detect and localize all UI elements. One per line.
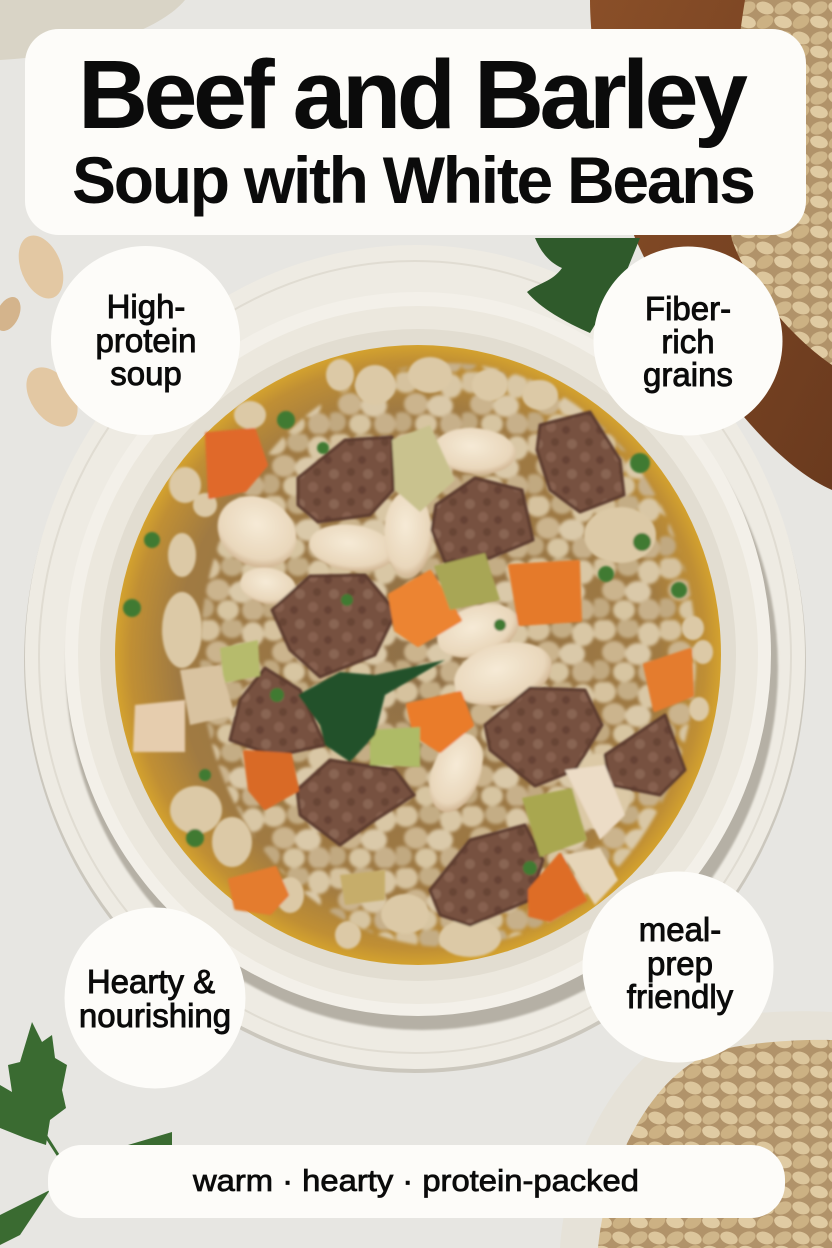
badge: hearty and nourishing: Hearty & (87, 963, 215, 1000)
title line 1: Beef and Barley (78, 40, 748, 149)
parsley sprig, bottom left (0, 1022, 172, 1245)
badge: fiber-rich grains: rich (661, 323, 715, 360)
ingredients layer (123, 357, 713, 957)
cloth in top-left corner (0, 0, 185, 60)
soup bowl (65, 292, 778, 1030)
badge: hearty and nourishing: nourishing (79, 997, 231, 1034)
parsley flecks (123, 411, 687, 875)
badge: meal-prep friendly: prep (647, 945, 713, 982)
tagline bar (48, 1145, 785, 1218)
soup broth (115, 345, 721, 965)
badge: fiber-rich grains: Fiber- (645, 290, 731, 327)
celery and onion pieces (133, 425, 625, 905)
white beans (204, 425, 559, 820)
badge: hearty and nourishing (64, 908, 246, 1088)
badge: high-protein soup: protein (96, 322, 196, 359)
parsley leaf in centre (298, 660, 445, 762)
parsley sprig behind bowl (527, 238, 640, 333)
badge: high-protein soup: High- (107, 288, 185, 325)
barley field in the broth (200, 363, 696, 947)
badge: high-protein soup (51, 246, 240, 435)
beef chunks (230, 412, 685, 925)
plate (24, 245, 806, 1073)
wooden bowl with barley, top right (590, 0, 832, 490)
carrots (207, 430, 692, 920)
badge: fiber-rich grains (594, 246, 782, 436)
loose white beans, left (0, 229, 88, 436)
badge: meal-prep friendly: meal- (639, 911, 721, 948)
small bowl of barley, bottom right (560, 1011, 832, 1248)
badge: fiber-rich grains: grains (643, 356, 733, 393)
badge: high-protein soup: soup (110, 355, 182, 392)
title panel (25, 29, 806, 235)
badge: meal-prep friendly: friendly (627, 978, 734, 1015)
barley and small beans in the broth (162, 357, 713, 957)
badge: meal-prep friendly (582, 872, 774, 1062)
title line 2: Soup with White Beans (72, 143, 756, 217)
tagline bar: warm · hearty · protein-packed (192, 1163, 639, 1198)
